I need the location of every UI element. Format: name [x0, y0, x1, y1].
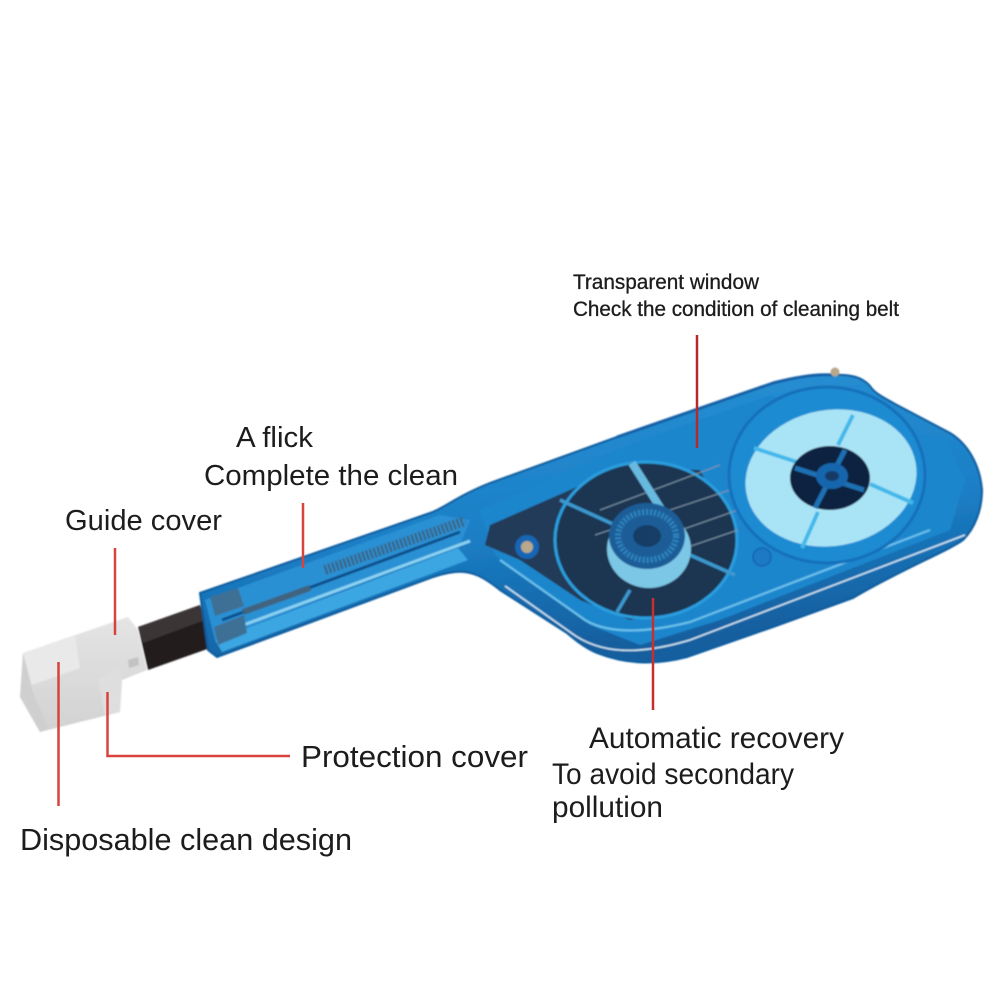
- small peg: [753, 548, 771, 566]
- handle channel and spring: [205, 515, 470, 652]
- black neck: [138, 605, 213, 670]
- callout: protection cover: [108, 692, 528, 774]
- callout: transparent window: Check the condition of cleaning belt: [573, 298, 899, 321]
- callout: transparent window: [573, 271, 899, 448]
- white guide cover tip: [20, 617, 147, 732]
- screw: [515, 535, 539, 559]
- callout: protection cover: Protection cover: [301, 739, 528, 774]
- lower spool: automatic recovery: [555, 462, 738, 618]
- blue body shell: [200, 375, 982, 663]
- callout: guide cover: Guide cover: [65, 505, 222, 537]
- dark interior wedge: [485, 468, 735, 620]
- callout: automatic recovery: pollution: [552, 791, 663, 824]
- callout: a flick: Complete the clean: [204, 460, 458, 492]
- callout: disposable clean design: Disposable clean design: [20, 822, 352, 857]
- callout: automatic recovery: Automatic recovery: [589, 722, 844, 755]
- callout: transparent window: Transparent window: [573, 271, 760, 294]
- callout: automatic recovery: To avoid secondary: [552, 758, 794, 791]
- callout: a flick: [204, 422, 458, 568]
- rivet on top edge: [830, 368, 840, 376]
- inner body panel: [480, 395, 965, 645]
- callout: a flick: A flick: [236, 422, 314, 454]
- upper spool: cleaning belt: [729, 387, 928, 563]
- callout: automatic recovery: [552, 598, 844, 824]
- product: fiber cleaner: [20, 368, 982, 732]
